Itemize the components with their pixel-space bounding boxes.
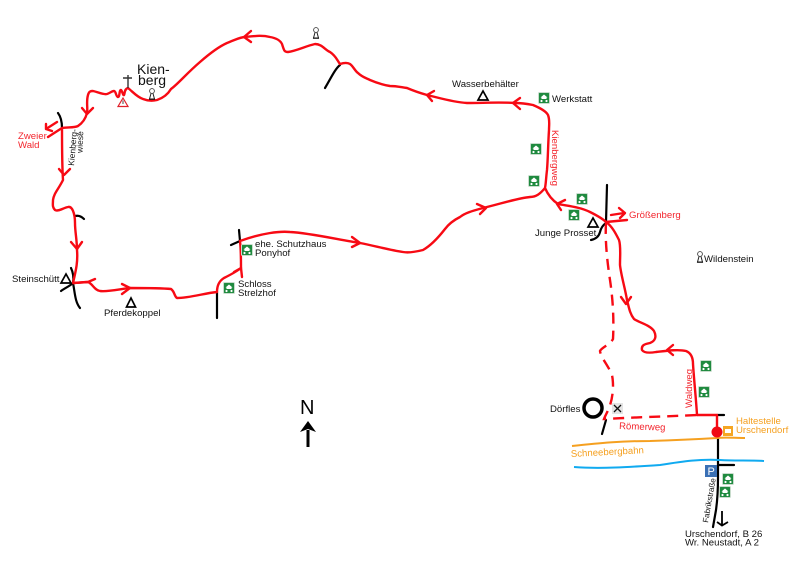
arrow: Größenberg <box>611 208 625 218</box>
icon: inn Werkstatt <box>538 92 550 104</box>
icon: inn Schutzhaus <box>242 244 252 256</box>
label: Wasserbehälter: Wasserbehälter <box>452 79 520 90</box>
label: ehe. Schutzhaus Ponyhof: Ponyhof <box>255 248 291 259</box>
north arrow: N <box>300 397 314 419</box>
label: Werkstatt: Werkstatt <box>552 94 593 105</box>
label: Kienbergweg: Kienbergweg <box>549 130 560 186</box>
label: Schloss Strelzhof: Strelzhof <box>238 288 276 299</box>
heading: Kienberg: Kien- <box>137 61 170 77</box>
route connectors <box>48 128 717 432</box>
icon: parking: P <box>708 466 715 478</box>
main red hiking route <box>53 36 697 415</box>
north arrow <box>300 397 316 447</box>
arrow: Urschendorf direction <box>717 511 728 526</box>
road stubs <box>58 65 734 527</box>
peak: Wasserbehälter <box>478 91 488 100</box>
label: destination: Wr. Neustadt, A 2 <box>685 538 759 548</box>
label: Größenberg: Größenberg <box>629 210 681 221</box>
icon: inn Waldweg north <box>700 360 712 372</box>
heading: Kienberg: berg <box>138 72 166 88</box>
label: Dörfles: Dörfles <box>550 404 581 415</box>
label: Steinschütt: Steinschütt <box>12 274 60 285</box>
icon: inn Prosset south <box>568 210 580 220</box>
peak: Steinschütt <box>61 274 71 283</box>
dashed route <box>600 223 697 419</box>
bus stop marker <box>712 426 722 438</box>
icon: inn Fabrikstraße south <box>720 486 730 498</box>
icon: lookout tower Kienberg <box>149 89 155 99</box>
icon: lookout tower north <box>313 28 319 38</box>
icon: bus <box>723 426 733 436</box>
label: ehe. Schutzhaus Ponyhof: ehe. Schutzhaus <box>255 239 326 250</box>
label: Waldweg: Waldweg <box>684 369 695 408</box>
railway line: Schneebergbahn <box>572 438 745 446</box>
label: Zweier Wald: Zweier <box>18 131 47 142</box>
label: Schloss Strelzhof: Schloss <box>238 279 272 290</box>
icon: parking <box>705 465 717 478</box>
icon: inn Waldweg south <box>698 386 710 398</box>
arrow: Zweier Wald <box>46 122 57 131</box>
label: destination: Urschendorf, B 26 <box>685 529 762 540</box>
icon: inn Kienbergweg south <box>528 176 540 186</box>
label: Schneebergbahn: Schneebergbahn <box>571 445 644 460</box>
label: Haltestelle Urschendorf: Urschendorf <box>736 425 789 436</box>
icon: inn Schloss Strelzhof <box>224 282 234 294</box>
label: Haltestelle Urschendorf: Haltestelle <box>736 416 781 427</box>
icon: inn Kienbergweg north <box>530 144 542 154</box>
label: Wildenstein: Wildenstein <box>704 254 754 265</box>
icon: crossed tools <box>612 403 623 414</box>
label: Römerweg: Römerweg <box>619 421 666 434</box>
label: Zweier Wald: Wald <box>18 140 40 151</box>
icon: inn Fabrikstraße north <box>722 474 734 484</box>
label: wiese: wiese <box>74 131 85 154</box>
label: Pferdekoppel: Pferdekoppel <box>104 308 161 319</box>
label: Kienbergwiese: Kienberg- <box>66 128 79 166</box>
label: Fabrikstraße: Fabrikstraße <box>701 477 718 523</box>
river <box>574 460 764 468</box>
direction arrows <box>59 31 673 355</box>
icon: warning sign <box>118 98 128 106</box>
peak: Junge Prosset <box>588 218 598 227</box>
Kienberg summit cross <box>123 75 132 88</box>
label: Junge Prosset: Junge Prosset <box>535 228 597 239</box>
icon: inn Prosset north <box>576 194 588 204</box>
peak: Pferdekoppel <box>126 298 136 307</box>
icon: lookout tower Wildenstein <box>697 252 703 262</box>
icon: Dörfles ring <box>584 399 602 417</box>
